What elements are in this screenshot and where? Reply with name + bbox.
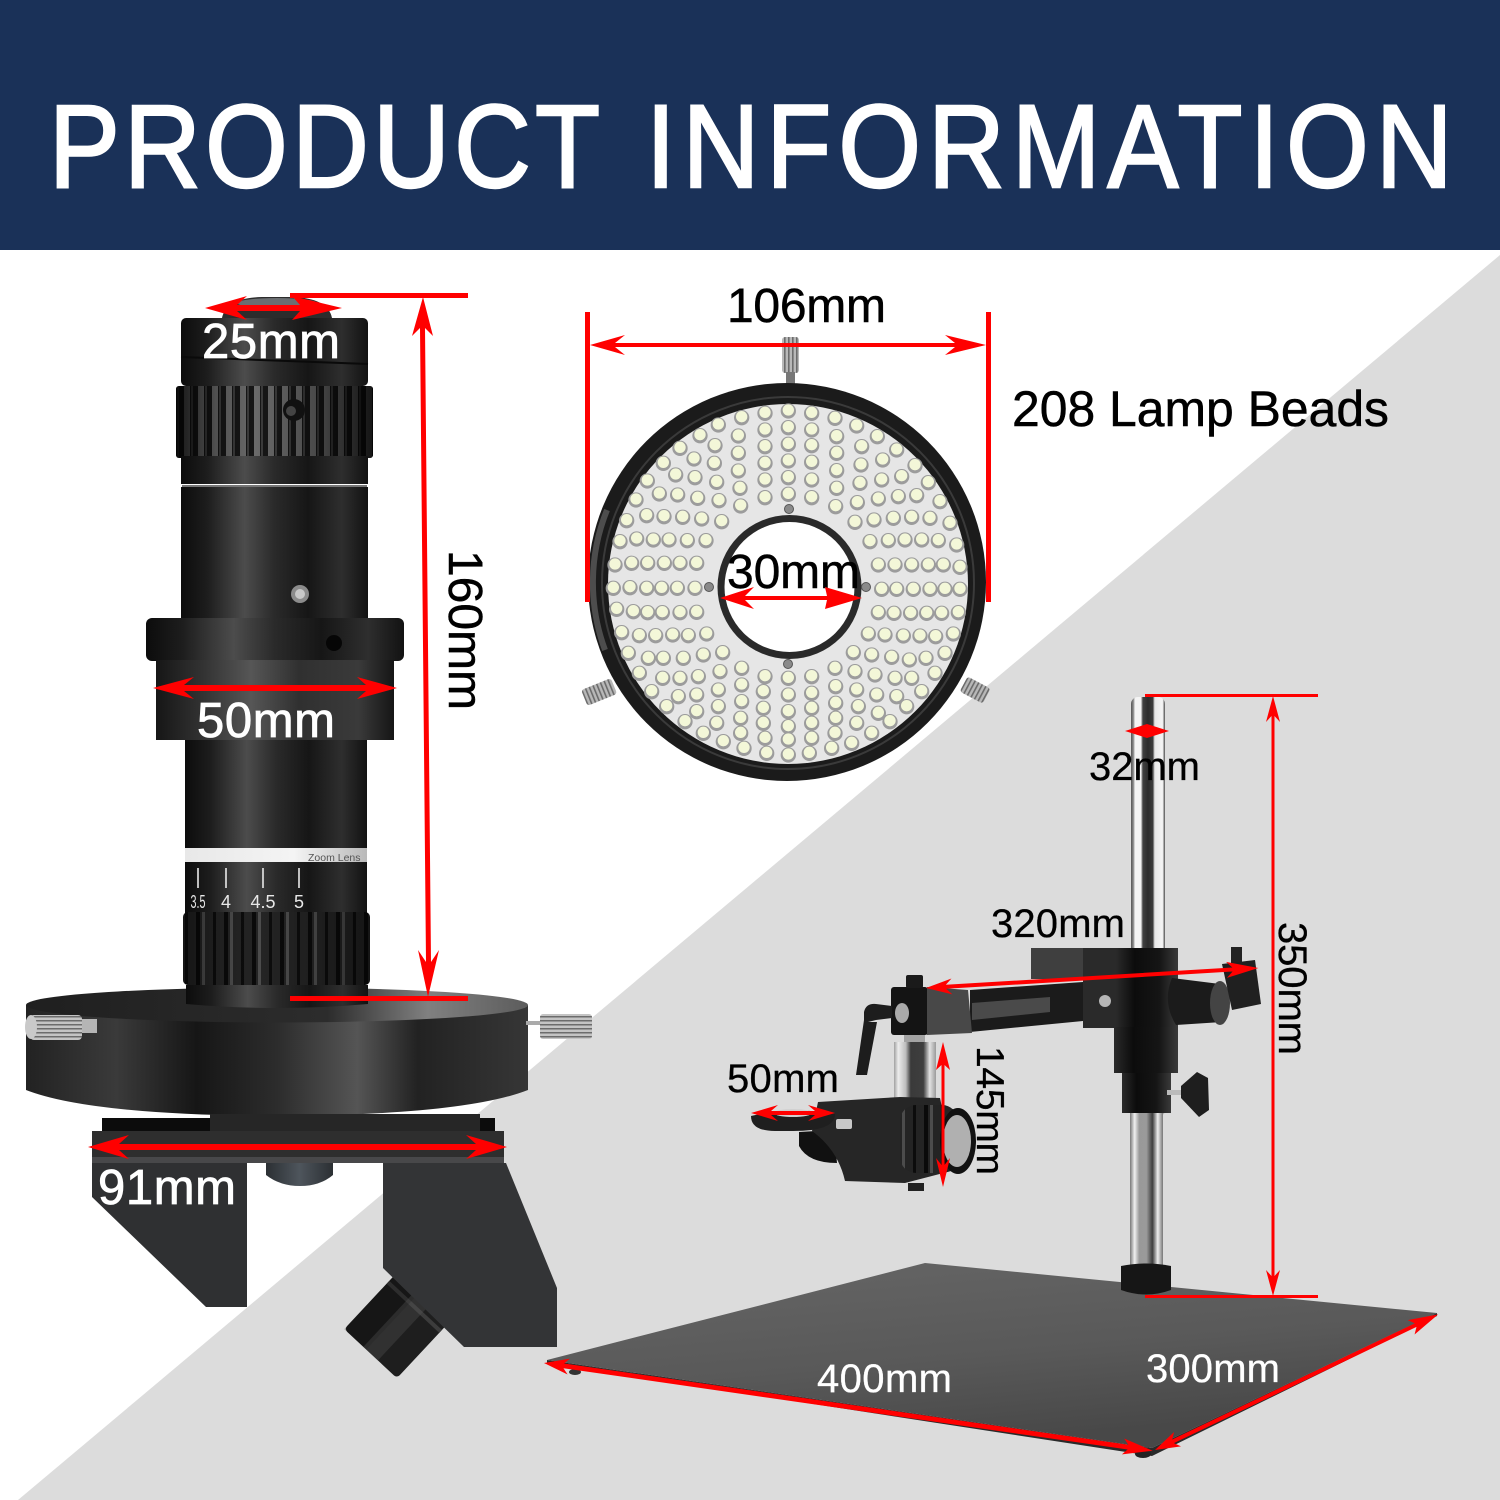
ring holder <box>751 1109 852 1131</box>
dovetail mount <box>92 1114 557 1378</box>
50mm arrow <box>153 677 397 699</box>
300mm label: 300mm <box>1146 1347 1280 1391</box>
lower barrel <box>185 740 367 848</box>
eyepiece <box>344 1262 460 1378</box>
300mm arrow <box>1152 1307 1442 1457</box>
arm right end <box>1222 947 1261 1010</box>
50mm stand label: 50mm <box>727 1057 839 1101</box>
zoom scale: 4 <box>221 892 231 912</box>
106mm label: 106mm <box>727 280 886 333</box>
350mm dimension <box>1145 694 1318 1298</box>
30mm label: 30mm <box>727 546 860 599</box>
arm clamp screw <box>1099 995 1111 1007</box>
top thumbscrew <box>782 337 799 385</box>
lens annotations <box>88 293 507 1215</box>
lower collar narrow <box>1122 1073 1171 1113</box>
arm top screw <box>906 975 923 988</box>
25mm label: 25mm <box>202 315 340 369</box>
base plate <box>547 1263 1437 1458</box>
light housing disc <box>25 988 592 1116</box>
LED board <box>608 404 968 764</box>
400mm label: 400mm <box>817 1357 952 1401</box>
350mm label: 350mm <box>1270 922 1314 1055</box>
right thumbscrew <box>526 1014 592 1039</box>
microscope stand photo <box>547 697 1437 1458</box>
zoom scale: 3.5 <box>190 892 206 912</box>
lower left thumbscrew <box>581 678 617 706</box>
block hole <box>895 1003 909 1023</box>
ring light annotations <box>585 280 1389 609</box>
silver band <box>185 848 367 862</box>
145mm label: 145mm <box>968 1046 1011 1175</box>
upper barrel <box>181 487 368 619</box>
rear block <box>1031 948 1091 979</box>
board screws <box>704 504 870 668</box>
32mm arrow <box>1125 724 1169 738</box>
width limit bars <box>585 312 991 602</box>
knurled ring <box>176 386 373 458</box>
focus head <box>812 1097 955 1183</box>
lock handle <box>856 1004 892 1075</box>
91mm label: 91mm <box>98 1161 236 1215</box>
left thumbscrew <box>25 1015 97 1040</box>
320mm arrow <box>926 960 1259 996</box>
106mm arrow <box>590 335 986 355</box>
post collar <box>1116 948 1178 1027</box>
rear focus knob <box>799 1130 837 1163</box>
focus knob <box>900 1105 976 1174</box>
LED beads <box>613 410 960 755</box>
flange <box>146 618 404 661</box>
title: INFORMATION <box>646 80 1460 212</box>
vertical post upper <box>1131 697 1165 1117</box>
400mm arrow <box>543 1355 1154 1459</box>
zoom scale: 5 <box>294 892 304 912</box>
arm bar <box>970 982 1083 1032</box>
title: PRODUCT <box>49 80 604 212</box>
collar <box>156 660 394 740</box>
zoom scale: 4.5 <box>250 892 276 912</box>
post base collar <box>1121 1264 1171 1294</box>
lower collar <box>1114 1027 1178 1073</box>
left leg <box>92 1163 247 1307</box>
320mm label: 320mm <box>991 902 1125 946</box>
145mm arrow <box>936 1042 950 1187</box>
50mm stand arrow <box>751 1105 835 1121</box>
title <box>49 80 1460 212</box>
lamp beads label: 208 Lamp Beads <box>1012 381 1389 437</box>
star knob <box>1167 1072 1209 1117</box>
zoom scale <box>185 862 367 914</box>
160mm label: 160mm <box>438 550 491 710</box>
30mm arrow <box>720 587 862 609</box>
vertical post lower <box>1130 1113 1163 1268</box>
stand annotations <box>543 694 1442 1459</box>
center aperture <box>718 515 862 659</box>
91mm arrow <box>88 1135 507 1159</box>
arm clamp front <box>1083 948 1117 1028</box>
dimension lines 160mm <box>290 293 468 1001</box>
lower right thumbscrew <box>960 676 991 704</box>
25mm arrow <box>205 296 342 320</box>
bottom screw <box>908 1183 924 1191</box>
zoom lens photo <box>146 297 404 1008</box>
arm left grey block <box>927 987 972 1035</box>
32mm label: 32mm <box>1089 745 1200 789</box>
right leg <box>383 1163 557 1347</box>
center lump <box>266 1163 333 1186</box>
header banner <box>0 0 1500 250</box>
50mm label: 50mm <box>197 694 335 748</box>
arm knob <box>1168 978 1230 1025</box>
arm left black block <box>891 987 928 1035</box>
ring light photo <box>581 337 991 781</box>
silver column <box>894 1035 936 1102</box>
top opening <box>222 297 332 318</box>
zoom lens caption: Zoom Lens <box>308 852 361 864</box>
lower knurled ring <box>183 912 370 985</box>
outer housing <box>588 383 986 781</box>
